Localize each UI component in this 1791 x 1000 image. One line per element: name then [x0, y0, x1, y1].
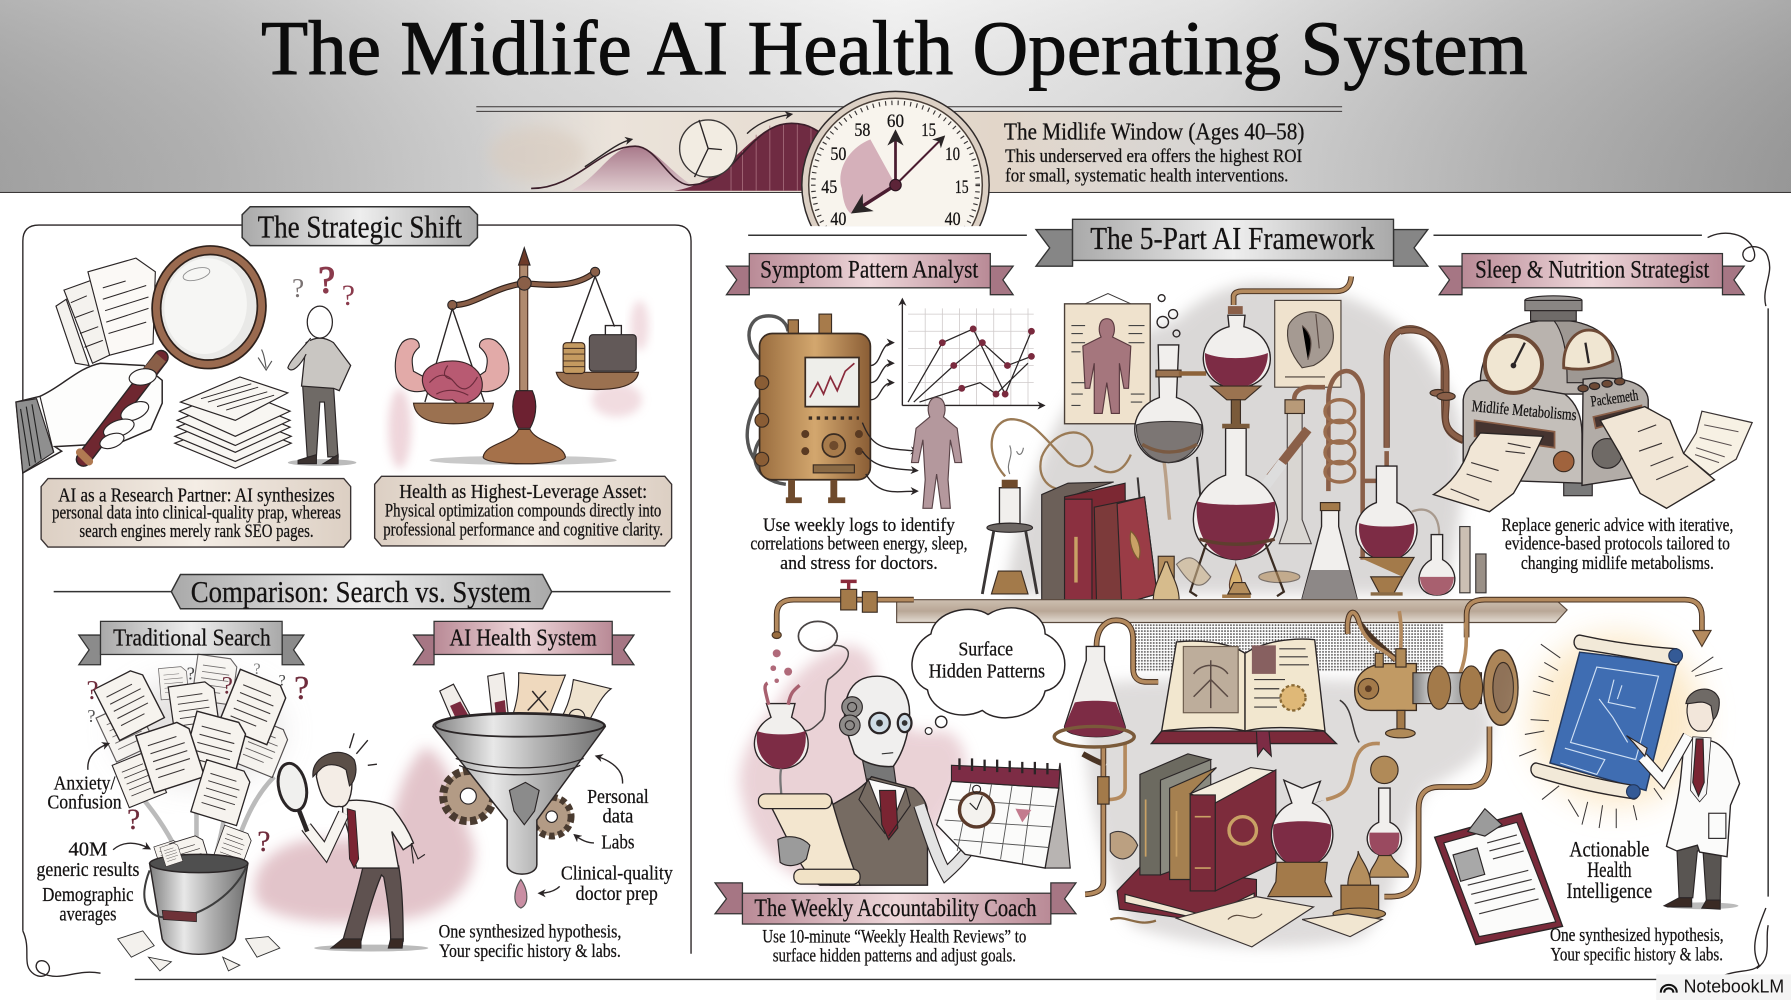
text block: health as highest leverage asset: Health as Highest-Leverage Asset:: [399, 481, 647, 503]
gauge dial: 10: [945, 144, 960, 165]
icon: pipe gear machine: [1347, 611, 1518, 738]
corner flourishes: [23, 233, 1770, 978]
icon: burst of papers and bucket: [94, 654, 290, 971]
banner: sleep and nutrition strategist: Sleep & Nutrition Strategist: [1475, 257, 1709, 284]
text block: sleep strategist description: evidence-based protocols tailored to: [1505, 533, 1730, 554]
gauge dial: 15: [921, 120, 936, 141]
text block: weekly coach description: [762, 926, 1026, 967]
text block: symptom analyst description: correlations between energy, sleep,: [750, 533, 967, 554]
text block: sleep strategist description: Replace generic advice with iterative,: [1501, 515, 1733, 536]
callout: right labels: [539, 756, 673, 905]
callout: right labels: doctor prep: [576, 883, 658, 905]
flask: right wine: [1356, 466, 1486, 595]
illustration: chemistry lab: [982, 276, 1486, 605]
pipes around lower lab: [1326, 700, 1489, 897]
callout: actionable health intelligence: Intelligence: [1567, 879, 1652, 903]
banner: AI health system: [413, 621, 634, 665]
banner: AI health system: AI Health System: [449, 625, 597, 651]
icon: open book: [1151, 639, 1336, 756]
icons: question marks: ?: [253, 661, 261, 678]
icon: robot coach: [754, 621, 982, 885]
gauge dial: 15: [955, 177, 969, 198]
heading: 5-part framework: [1036, 219, 1428, 266]
jar on stool with tube: [982, 419, 1131, 594]
icon: thinking man with question marks: [288, 259, 356, 466]
icon: human silhouette: [911, 397, 962, 508]
panel: strategic shift and comparison frame: [23, 225, 691, 954]
icon: thought bubble: Hidden Patterns: [929, 660, 1045, 682]
banner: weekly accountability coach: [715, 883, 1076, 924]
flask: grey bulb: [1135, 345, 1203, 527]
text block: health as highest leverage asset: [375, 476, 672, 546]
midlife window text: for small, systematic health interventions.: [1005, 166, 1288, 187]
notebooklm watermark: NotebookLM: [1684, 976, 1784, 997]
gauge dial: 40: [945, 209, 961, 230]
text block: one synthesized hypothesis left: [439, 922, 621, 962]
flask: large wine with side arm: [1190, 426, 1308, 596]
icon: thinking man with question marks: ?: [318, 259, 335, 301]
callout: left labels: averages: [59, 904, 117, 926]
callout: right labels: Clinical-quality: [561, 862, 673, 884]
outer frame lines: [54, 235, 1768, 979]
text block: symptom analyst description: Use weekly logs to identify: [763, 515, 955, 536]
icon: doctor: [1627, 689, 1740, 909]
text block: symptom analyst description: [750, 515, 967, 574]
callout: right labels: Labs: [601, 832, 635, 854]
callout: right labels: Personal: [587, 786, 649, 808]
text block: symptom analyst description: and stress for doctors.: [780, 553, 938, 574]
heading: 5-part framework: The 5-Part AI Framework: [1090, 221, 1375, 256]
icon: funnel with tubes and gears: [433, 673, 611, 908]
banner: sleep and nutrition strategist: [1439, 254, 1744, 295]
text block: health as highest leverage asset: Physical optimization compounds directly into: [385, 500, 661, 521]
callout: left labels: Confusion: [47, 792, 122, 814]
poster: anatomy: [1065, 294, 1150, 424]
icon: thinking man with question marks: ?: [342, 280, 355, 312]
text block: AI as a research partner: [41, 479, 351, 547]
text block: AI as a research partner: search engines merely rank SEO pages.: [79, 521, 314, 542]
heading: comparison: Comparison: Search vs. System: [191, 575, 531, 609]
callout: actionable health intelligence: [1567, 838, 1652, 903]
text block: weekly coach description: surface hidden patterns and adjust goals.: [773, 946, 1016, 967]
title: The Midlife AI Health Operating System: [261, 5, 1528, 91]
icon: symptom device: [747, 314, 917, 500]
text block: one synthesized hypothesis right: One synthesized hypothesis,: [1550, 925, 1724, 946]
illustration: shelf: [897, 600, 1567, 623]
text block: one synthesized hypothesis left: One synthesized hypothesis,: [439, 922, 621, 943]
icons: question marks: ?: [294, 669, 309, 707]
icons: question marks: ?: [222, 672, 233, 699]
text block: AI as a research partner: personal data into clinical-quality prap, whereas: [52, 503, 341, 524]
notebooklm watermark: [1656, 974, 1791, 1000]
icon: thinking man with question marks: ?: [292, 273, 304, 303]
icons: question marks: ?: [187, 664, 195, 684]
text block: one synthesized hypothesis right: Your specific history & labs.: [1551, 945, 1723, 966]
text block: one synthesized hypothesis right: [1550, 925, 1724, 966]
icon: scroll: [758, 794, 860, 885]
icon: wine flask and burner: [1110, 756, 1408, 947]
callout: left labels: [37, 744, 150, 926]
icon: stacked books: [1110, 754, 1276, 922]
banner: symptom pattern analyst: Symptom Pattern Analyst: [760, 257, 978, 284]
icon: pipes and valve: [772, 581, 1711, 646]
icon: thought bubble: [912, 608, 1065, 734]
midlife window text: This underserved era offers the highest ROI: [1005, 146, 1302, 167]
gauge dial: 60: [887, 111, 904, 132]
text block: AI as a research partner: AI as a Research Partner: AI synthesizes: [58, 484, 335, 506]
icon: clipboard: [1435, 809, 1563, 945]
gauge dial: 45: [821, 177, 837, 198]
text block: weekly coach description: Use 10-minute “Weekly Health Reviews” to: [762, 926, 1026, 947]
text block: one synthesized hypothesis left: Your specific history & labs.: [439, 941, 621, 962]
banner: traditional search: [79, 621, 304, 665]
icon: sleep and nutrition machine: Midlife Metabolisms: [1471, 396, 1577, 424]
icon: frustrated man with magnifier: [274, 733, 428, 951]
callout: left labels: generic results: [37, 859, 139, 881]
icon: thought bubble: Surface: [958, 639, 1013, 661]
icon: blueprint: [1519, 635, 1722, 828]
icons: question marks: ?: [127, 804, 140, 836]
text block: sleep strategist description: [1501, 515, 1733, 574]
banner: traditional search: Traditional Search: [113, 625, 271, 651]
icon: calendar with stopwatch: [937, 758, 1070, 868]
icons: question marks: ?: [87, 706, 95, 726]
callout: actionable health intelligence: Actionable: [1569, 838, 1649, 862]
gauge dial: 58: [854, 120, 870, 141]
shelf props: [1153, 556, 1300, 605]
callout: left labels: 40M: [69, 839, 107, 861]
icon: scales with brain and briefcase: [388, 248, 649, 468]
banner: symptom pattern analyst: [726, 254, 1013, 295]
callout: right labels: data: [603, 805, 633, 827]
midlife window text: The Midlife Window (Ages 40–58): [1004, 119, 1304, 145]
gauge dial: 40: [830, 209, 846, 230]
icon: magnifying glass with hand: [16, 243, 269, 473]
icons: question marks: ?: [257, 826, 270, 858]
text block: health as highest leverage asset: professional performance and cognitive clarity.: [383, 520, 663, 541]
callout: left labels: Anxiety/: [54, 772, 116, 794]
midlife window text: [1004, 119, 1304, 187]
flask: wine sphere: [1179, 276, 1351, 427]
icon: sleep and nutrition machine: [1400, 296, 1752, 512]
callout: actionable health intelligence: Health: [1587, 858, 1632, 882]
icons: question marks: [86, 661, 309, 858]
condenser and coil: [1279, 328, 1463, 560]
text block: sleep strategist description: changing midlife metabolisms.: [1521, 553, 1714, 574]
icon: sleep and nutrition machine: Packemeth: [1590, 387, 1640, 410]
midlife window timeline illustration: [476, 107, 1342, 192]
icons: question marks: ?: [86, 675, 99, 705]
header band: [0, 0, 1791, 192]
chart: correlation chart: [902, 299, 1044, 405]
callout: left labels: Demographic: [42, 884, 134, 906]
illustration: lower lab flask and pipes: [1054, 620, 1158, 894]
flask: erlenmeyer: [1302, 503, 1357, 604]
books on upper shelf: [1042, 482, 1157, 604]
poster: heart: [1275, 300, 1341, 387]
icons: question marks: ?: [279, 672, 286, 689]
gauge dial: [801, 90, 990, 226]
gauge dial: 50: [830, 144, 846, 165]
icon: paper stack: [175, 350, 291, 468]
heading: The Strategic Shift: The Strategic Shift: [258, 210, 462, 245]
banner: weekly accountability coach: The Weekly Accountability Coach: [754, 895, 1037, 922]
